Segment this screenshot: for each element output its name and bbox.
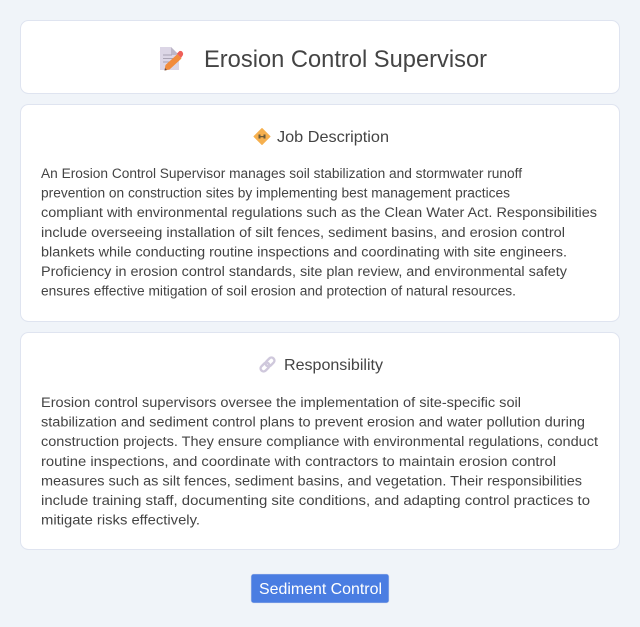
text block: job description: An Erosion Control Supervisor manages soil stabilization and stormwater runoff	[41, 166, 522, 182]
text block: job description: prevention on construction sites by implementing best management practices	[41, 186, 510, 202]
text block: responsibility: measures such as silt fences, sediment basins, and vegetation. Their responsibilities	[41, 473, 582, 489]
text block: job description: blankets while conducting routine inspections and coordinating with site engineers.	[41, 244, 567, 260]
icon: road sign diamond	[254, 128, 270, 144]
heading: responsibility: Responsibility	[284, 357, 383, 374]
text block: responsibility: include training staff, documenting site conditions, and adapting control practices to	[41, 493, 590, 509]
text block: responsibility: Erosion control supervisors oversee the implementation of site-specific soil	[41, 395, 521, 411]
panel: job description	[20, 104, 620, 322]
text block: responsibility: stabilization and sediment control plans to prevent erosion and water pollution during	[41, 415, 585, 431]
text block: job description: Proficiency in erosion control standards, site plan review, and environmental safety	[41, 264, 568, 280]
heading: title: Erosion Control Supervisor	[204, 46, 487, 73]
text block: responsibility: construction projects. They ensure compliance with environmental regulations, conduct	[41, 434, 598, 450]
tag button: sediment control: Sediment Control	[259, 581, 382, 598]
text block: job description	[41, 166, 597, 300]
text block: job description: include overseeing installation of silt fences, sediment basins, and erosion control	[41, 225, 565, 241]
panel: responsibility	[20, 332, 620, 550]
text block: responsibility: mitigate risks effectively.	[41, 513, 200, 529]
icon: chain link	[259, 356, 276, 373]
icon: document with pencil	[160, 47, 183, 70]
text block: responsibility	[41, 395, 598, 529]
heading: job description: Job Description	[277, 129, 389, 146]
tag button: sediment control	[251, 574, 389, 603]
text block: responsibility: routine inspections, and coordinate with contractors to maintain erosion control	[41, 454, 556, 470]
text block: job description: compliant with environmental regulations such as the Clean Water Act. Responsibilities	[41, 205, 597, 221]
panel: title	[20, 20, 620, 94]
text block: job description: ensures effective mitigation of soil erosion and protection of natural resources.	[41, 284, 516, 300]
